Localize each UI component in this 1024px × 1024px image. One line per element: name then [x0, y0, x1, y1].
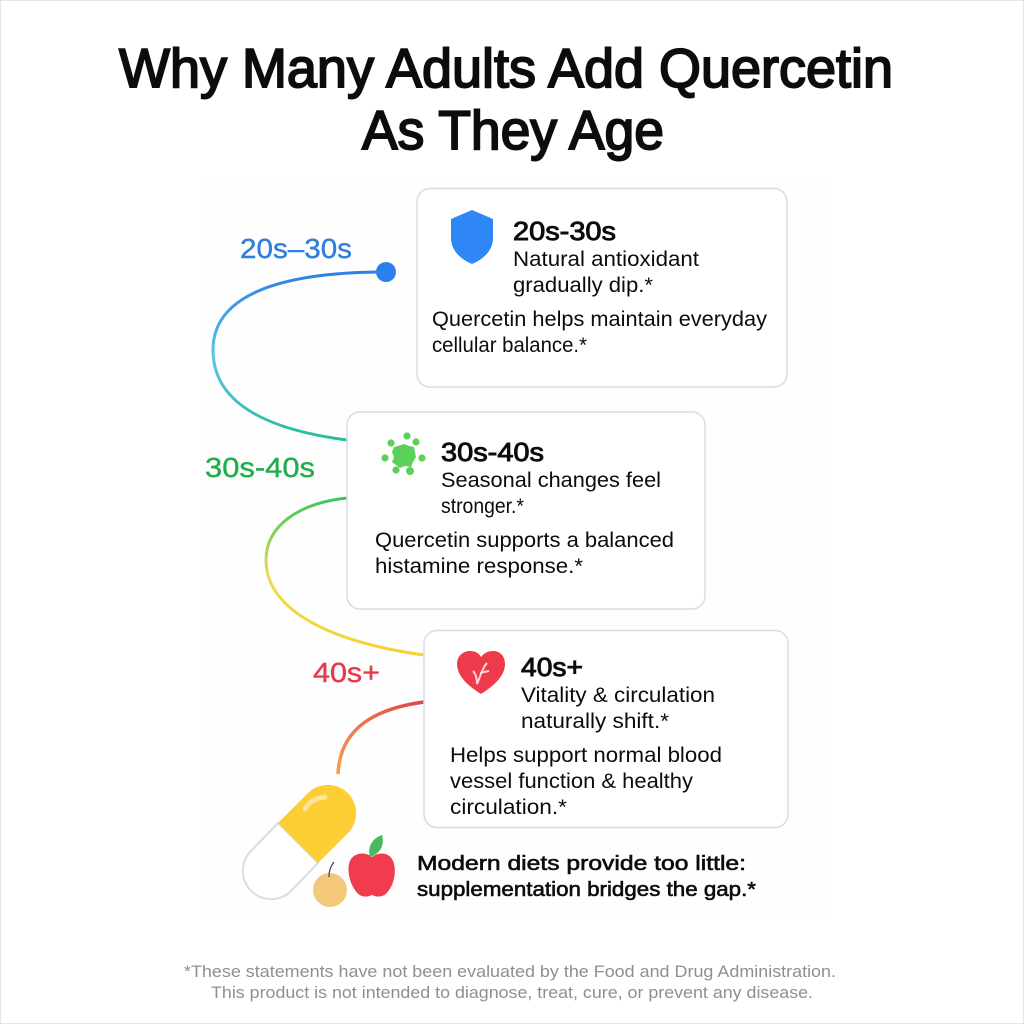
text: histamine response	[375, 528, 674, 578]
text: antioxidant dip	[513, 247, 699, 297]
footer disclaimer: *These statements have not been evaluated by the Food and Drug Administration.	[184, 962, 836, 981]
timeline curve: 40s+	[338, 702, 424, 774]
text: histamine response: Quercetin supports a balanced	[375, 528, 674, 552]
title	[119, 37, 893, 161]
icon: capsule	[243, 785, 356, 899]
text: cellular balance: Quercetin helps maintain everyday	[432, 307, 767, 331]
text: blood vessel support: vessel function & healthy	[450, 769, 693, 793]
label: 30s-40s: 30s-40s	[205, 452, 315, 483]
text: seasonal changes: stronger.*	[441, 494, 525, 518]
panel: 40s+	[424, 630, 788, 828]
timeline curve: 30s-40s	[266, 498, 424, 655]
footer disclaimer: This product is not intended to diagnose, treat, cure, or prevent any disease.	[211, 983, 813, 1002]
title: Why Many Adults Add Quercetin	[119, 37, 893, 99]
heading: 30s-40s: 30s-40s	[441, 437, 544, 467]
text: antioxidant dip: Natural antioxidant	[513, 247, 699, 271]
icon: shield	[451, 210, 493, 264]
text: blood vessel support: circulation.*	[450, 795, 568, 819]
text: blood vessel support	[450, 743, 722, 819]
heading: 40s+: 40s+	[521, 652, 583, 682]
callout: modern diets	[417, 852, 756, 901]
text: vitality and circulation: Vitality & circulation	[521, 683, 715, 707]
callout: modern diets: Modern diets provide too little:	[417, 852, 746, 875]
icon: heart	[457, 651, 505, 694]
text: vitality and circulation: naturally shift.*	[521, 709, 670, 733]
heading: 20s-30s: 20s-30s	[513, 216, 616, 246]
panel: 30s-40s	[347, 412, 705, 609]
label: 40s+: 40s+	[313, 657, 380, 688]
panel: 20s-30s	[417, 188, 787, 387]
icon: small fruit	[313, 862, 347, 907]
timeline curve: 20s-30s	[213, 262, 396, 440]
text: seasonal changes: Seasonal changes feel	[441, 468, 661, 492]
text: seasonal changes	[441, 468, 661, 518]
icon: allergen particle	[381, 432, 426, 475]
title: As They Age	[362, 99, 664, 161]
icon: apple	[348, 835, 395, 897]
footer disclaimer	[184, 962, 836, 1002]
text: antioxidant dip: gradually dip.*	[513, 273, 654, 297]
text: histamine response: histamine response.*	[375, 554, 584, 578]
label: 20s-30s: 20s–30s	[240, 233, 352, 264]
text: cellular balance: cellular balance.*	[432, 333, 588, 357]
text: cellular balance	[432, 307, 767, 357]
text: vitality and circulation	[521, 683, 715, 733]
callout: modern diets: supplementation bridges the gap.*	[417, 878, 756, 901]
text: blood vessel support: Helps support normal blood	[450, 743, 722, 767]
